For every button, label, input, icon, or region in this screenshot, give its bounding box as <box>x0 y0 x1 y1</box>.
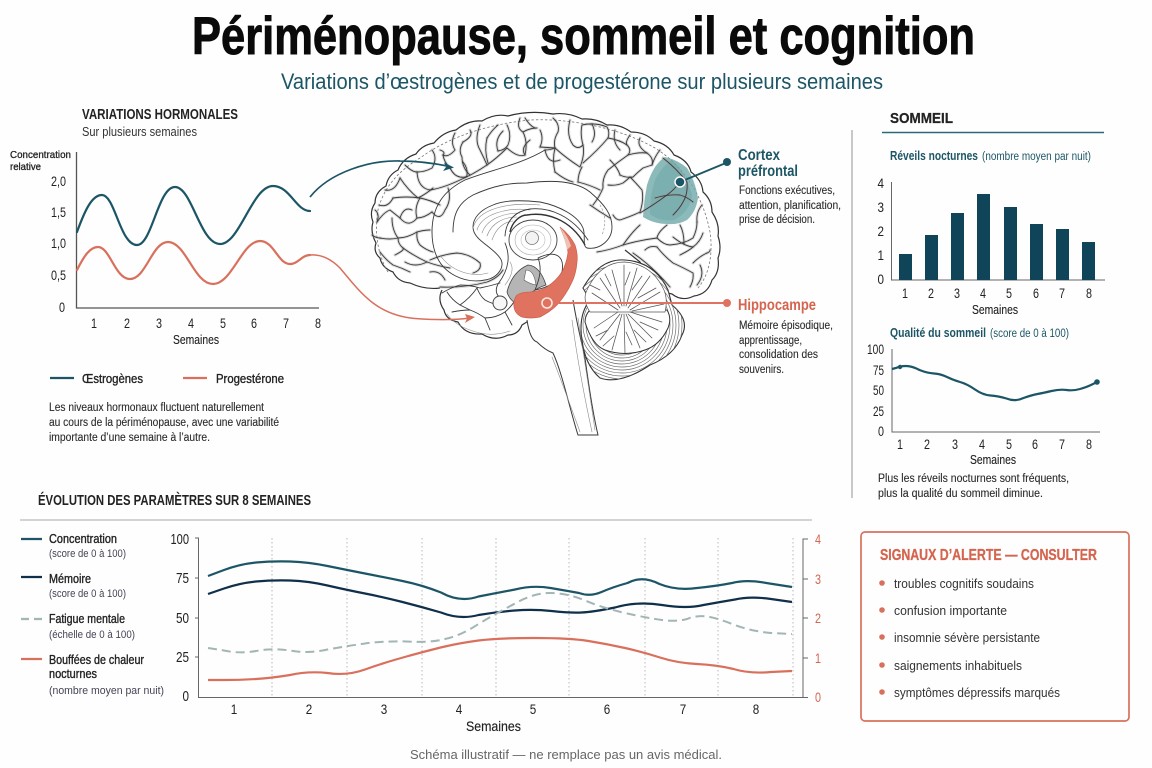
multi-line chart: 5 <box>530 701 536 717</box>
line: oestrogènes <box>77 186 310 245</box>
legend: concentration <box>21 532 126 560</box>
hormone line chart: 6 <box>251 316 257 331</box>
multi-line chart: 75 <box>176 570 189 587</box>
hormone line chart <box>51 152 321 347</box>
text: sommeil note: plus la qualité du sommeil diminue. <box>878 488 1043 500</box>
hormone line chart: 0,5 <box>51 268 66 283</box>
multi-line chart <box>170 531 821 734</box>
panel: signaux d'alerte <box>861 532 1129 721</box>
text: sommeil note: Plus les réveils nocturnes sont fréquents, <box>878 473 1069 485</box>
hormone line chart: 3 <box>156 316 162 331</box>
list item: troubles cognitifs soudains <box>894 577 1034 591</box>
bar chart: réveils nocturnes: 4 <box>878 176 884 191</box>
multi-line chart: 4 <box>456 701 462 717</box>
line chart: qualité du sommeil: 2 <box>924 437 930 452</box>
multi-line chart: Semaines <box>466 718 521 734</box>
heading: sommeil: SOMMEIL <box>890 110 953 127</box>
multi-line chart: 2 <box>815 610 821 626</box>
multi-line chart: 50 <box>176 610 189 627</box>
multi-line chart: 6 <box>604 701 610 717</box>
hormone line chart: 7 <box>283 316 289 331</box>
marker: hippocampe <box>542 298 731 308</box>
multi-line chart: 0 <box>815 689 821 705</box>
legend: mémoire: (score de 0 à 100) <box>49 588 126 600</box>
legend: fatigue mentale: (échelle de 0 à 100) <box>49 629 135 641</box>
bar chart: réveils nocturnes: 0 <box>878 272 884 287</box>
footer note: Schéma illustratif — ne remplace pas un avis médical. <box>410 747 722 762</box>
bar chart: réveils nocturnes <box>878 176 1105 317</box>
line chart: qualité du sommeil: 6 <box>1032 437 1038 452</box>
panel: évolution des paramètres <box>20 492 821 734</box>
multi-line chart: 7 <box>680 701 686 717</box>
legend: fatigue mentale: Fatigue mentale <box>49 612 125 626</box>
hormone line chart: 2 <box>124 316 130 331</box>
y axis title: relative <box>10 161 41 173</box>
brain illustration <box>310 112 731 435</box>
line chart: qualité du sommeil: 7 <box>1059 437 1065 452</box>
hormone line chart: 8 <box>315 316 321 331</box>
line: mémoire <box>208 580 792 617</box>
hormone line chart: 1,0 <box>51 236 66 251</box>
legend: fatigue mentale <box>21 612 135 641</box>
line chart: qualité du sommeil: 25 <box>873 404 884 419</box>
cerebrum <box>371 112 720 299</box>
title: Périménopause, sommeil et cognition <box>192 7 975 66</box>
label: cortex préfrontal: attention, planification, <box>739 200 841 212</box>
line chart: qualité du sommeil: 75 <box>873 363 884 378</box>
bar chart: réveils nocturnes: 2 <box>878 224 884 239</box>
multi-line chart: 4 <box>815 531 821 547</box>
label: hippocampe <box>738 297 833 376</box>
subtitle: Variations d’œstrogènes et de progestérone sur plusieurs semaines <box>281 69 883 94</box>
bar chart: réveils nocturnes: 7 <box>1059 286 1065 301</box>
cerebellum <box>580 259 685 380</box>
line: fatigue mentale <box>208 593 792 652</box>
label: cortex préfrontal: prise de décision. <box>739 214 815 226</box>
bar chart: réveils nocturnes: 5 <box>1006 286 1012 301</box>
line chart title: (score de 0 à 100) <box>990 328 1069 340</box>
list item: insomnie sévère persistante <box>894 631 1040 645</box>
label: hippocampe: consolidation des <box>739 349 818 361</box>
line chart: qualité du sommeil: 50 <box>873 383 884 398</box>
heading: signaux d'alerte: SIGNAUX D’ALERTE — CONSULTER <box>880 547 1097 564</box>
bar chart title: (nombre moyen par nuit) <box>982 151 1091 163</box>
legend: bouffées de chaleur <box>21 653 164 697</box>
text: hormones note: importante d’une semaine à l’autre. <box>49 432 210 444</box>
bar chart title <box>890 149 1091 163</box>
line chart: qualité du sommeil <box>867 342 1100 467</box>
subheading: Sur plusieurs semaines <box>82 125 197 139</box>
legend: mémoire: Mémoire <box>49 572 91 586</box>
y axis title <box>10 149 71 173</box>
prefrontal highlight <box>643 157 698 224</box>
label: cortex préfrontal: Fonctions exécutives, <box>739 185 835 197</box>
bar chart: réveils nocturnes: 3 <box>954 286 960 301</box>
hormone line chart: Semaines <box>173 333 219 347</box>
line chart: qualité du sommeil: 3 <box>952 437 958 452</box>
multi-line chart: 2 <box>306 701 312 717</box>
line: progestérone <box>77 241 310 284</box>
sulci <box>372 118 710 287</box>
arrow: oestrogènes vers le cerveau <box>310 161 454 197</box>
text: hormones note: Les niveaux hormonaux fluctuent naturellement <box>49 402 265 414</box>
list item: symptômes dépressifs marqués <box>894 686 1060 700</box>
line: bouffées de chaleur <box>208 638 792 680</box>
hormone line chart: 1 <box>91 316 97 331</box>
label: hippocampe: apprentissage, <box>739 335 802 347</box>
bar chart: réveils nocturnes: 3 <box>878 200 884 215</box>
arrow: progestérone vers le cerveau <box>310 255 475 323</box>
label: hippocampe: Mémoire épisodique, <box>739 320 833 332</box>
panel: variations hormonales <box>10 107 321 444</box>
heading: variations hormonales: VARIATIONS HORMONALES <box>82 107 238 123</box>
legend: bouffées de chaleur: nocturnes <box>49 667 97 681</box>
multi-line chart: 1 <box>231 701 237 717</box>
y axis title: Concentration <box>10 149 71 161</box>
label: cortex préfrontal: Cortex <box>738 147 780 164</box>
line chart: qualité du sommeil: 1 <box>897 437 903 452</box>
multi-line chart: 3 <box>381 701 387 717</box>
hormone line chart: 5 <box>220 316 226 331</box>
text: sommeil note <box>878 473 1069 500</box>
bar chart: réveils nocturnes: 2 <box>928 286 934 301</box>
text: hormones note <box>49 402 279 444</box>
legend: concentration: (score de 0 à 100) <box>49 548 126 560</box>
line chart title: Qualité du sommeil <box>890 326 986 340</box>
label: hippocampe: Hippocampe <box>738 297 816 314</box>
legend: oestrogènes <box>50 371 143 386</box>
legend: oestrogènes: Œstrogènes <box>82 371 143 386</box>
line chart: qualité du sommeil: 5 <box>1006 437 1012 452</box>
legend: concentration: Concentration <box>49 532 117 546</box>
hormone line chart: 4 <box>188 316 194 331</box>
corpus callosum <box>432 150 612 281</box>
hormone line chart: 2,0 <box>51 174 66 189</box>
line chart: qualité du sommeil: Semaines <box>970 453 1016 467</box>
multi-line chart: 0 <box>182 688 189 705</box>
text: hormones note: au cours de la périménopause, avec une variabilité <box>49 417 279 429</box>
hippocampus <box>514 227 577 318</box>
multi-line chart: 1 <box>815 650 821 666</box>
hormone line chart: 0 <box>59 300 65 315</box>
brainstem <box>527 300 598 435</box>
line chart: qualité du sommeil: 4 <box>979 437 985 452</box>
line chart: qualité du sommeil: 8 <box>1086 437 1092 452</box>
hormone line chart: 1,5 <box>51 205 66 220</box>
list item: confusion importante <box>894 604 1007 618</box>
legend: mémoire <box>21 572 126 600</box>
panel: sommeil <box>852 110 1105 500</box>
label: cortex préfrontal: préfrontal <box>738 163 798 180</box>
list item: saignements inhabituels <box>894 659 1022 673</box>
bar chart title: Réveils nocturnes <box>890 149 978 163</box>
thalamus and central structures <box>473 204 588 310</box>
label: cortex préfrontal <box>738 147 841 226</box>
line chart: qualité du sommeil: 0 <box>878 424 884 439</box>
heading: évolution: ÉVOLUTION DES PARAMÈTRES SUR 8 SEMAINES <box>38 492 311 509</box>
multi-line chart: 8 <box>753 701 759 717</box>
temporal lobe <box>440 283 530 338</box>
bar chart: réveils nocturnes: 4 <box>980 286 986 301</box>
multi-line chart: 3 <box>815 571 821 587</box>
label: hippocampe: souvenirs. <box>739 364 784 376</box>
legend: bouffées de chaleur: Bouffées de chaleur <box>49 653 144 667</box>
bar chart: réveils nocturnes: Semaines <box>972 303 1018 317</box>
line: concentration <box>208 561 792 599</box>
multi-line chart: 100 <box>170 531 189 548</box>
bar chart: réveils nocturnes: 1 <box>902 286 908 301</box>
multi-line chart: 25 <box>176 649 189 666</box>
marker: cortex préfrontal <box>675 158 731 187</box>
bar chart: réveils nocturnes: 8 <box>1086 286 1092 301</box>
line chart: qualité du sommeil: 100 <box>867 342 884 357</box>
line chart title <box>890 326 1069 340</box>
legend: progestérone <box>183 371 284 386</box>
bar chart: réveils nocturnes: 1 <box>878 248 884 263</box>
bar chart: réveils nocturnes: 6 <box>1033 286 1039 301</box>
legend: bouffées de chaleur: (nombre moyen par nuit) <box>49 685 164 697</box>
legend: progestérone: Progestérone <box>216 371 284 386</box>
